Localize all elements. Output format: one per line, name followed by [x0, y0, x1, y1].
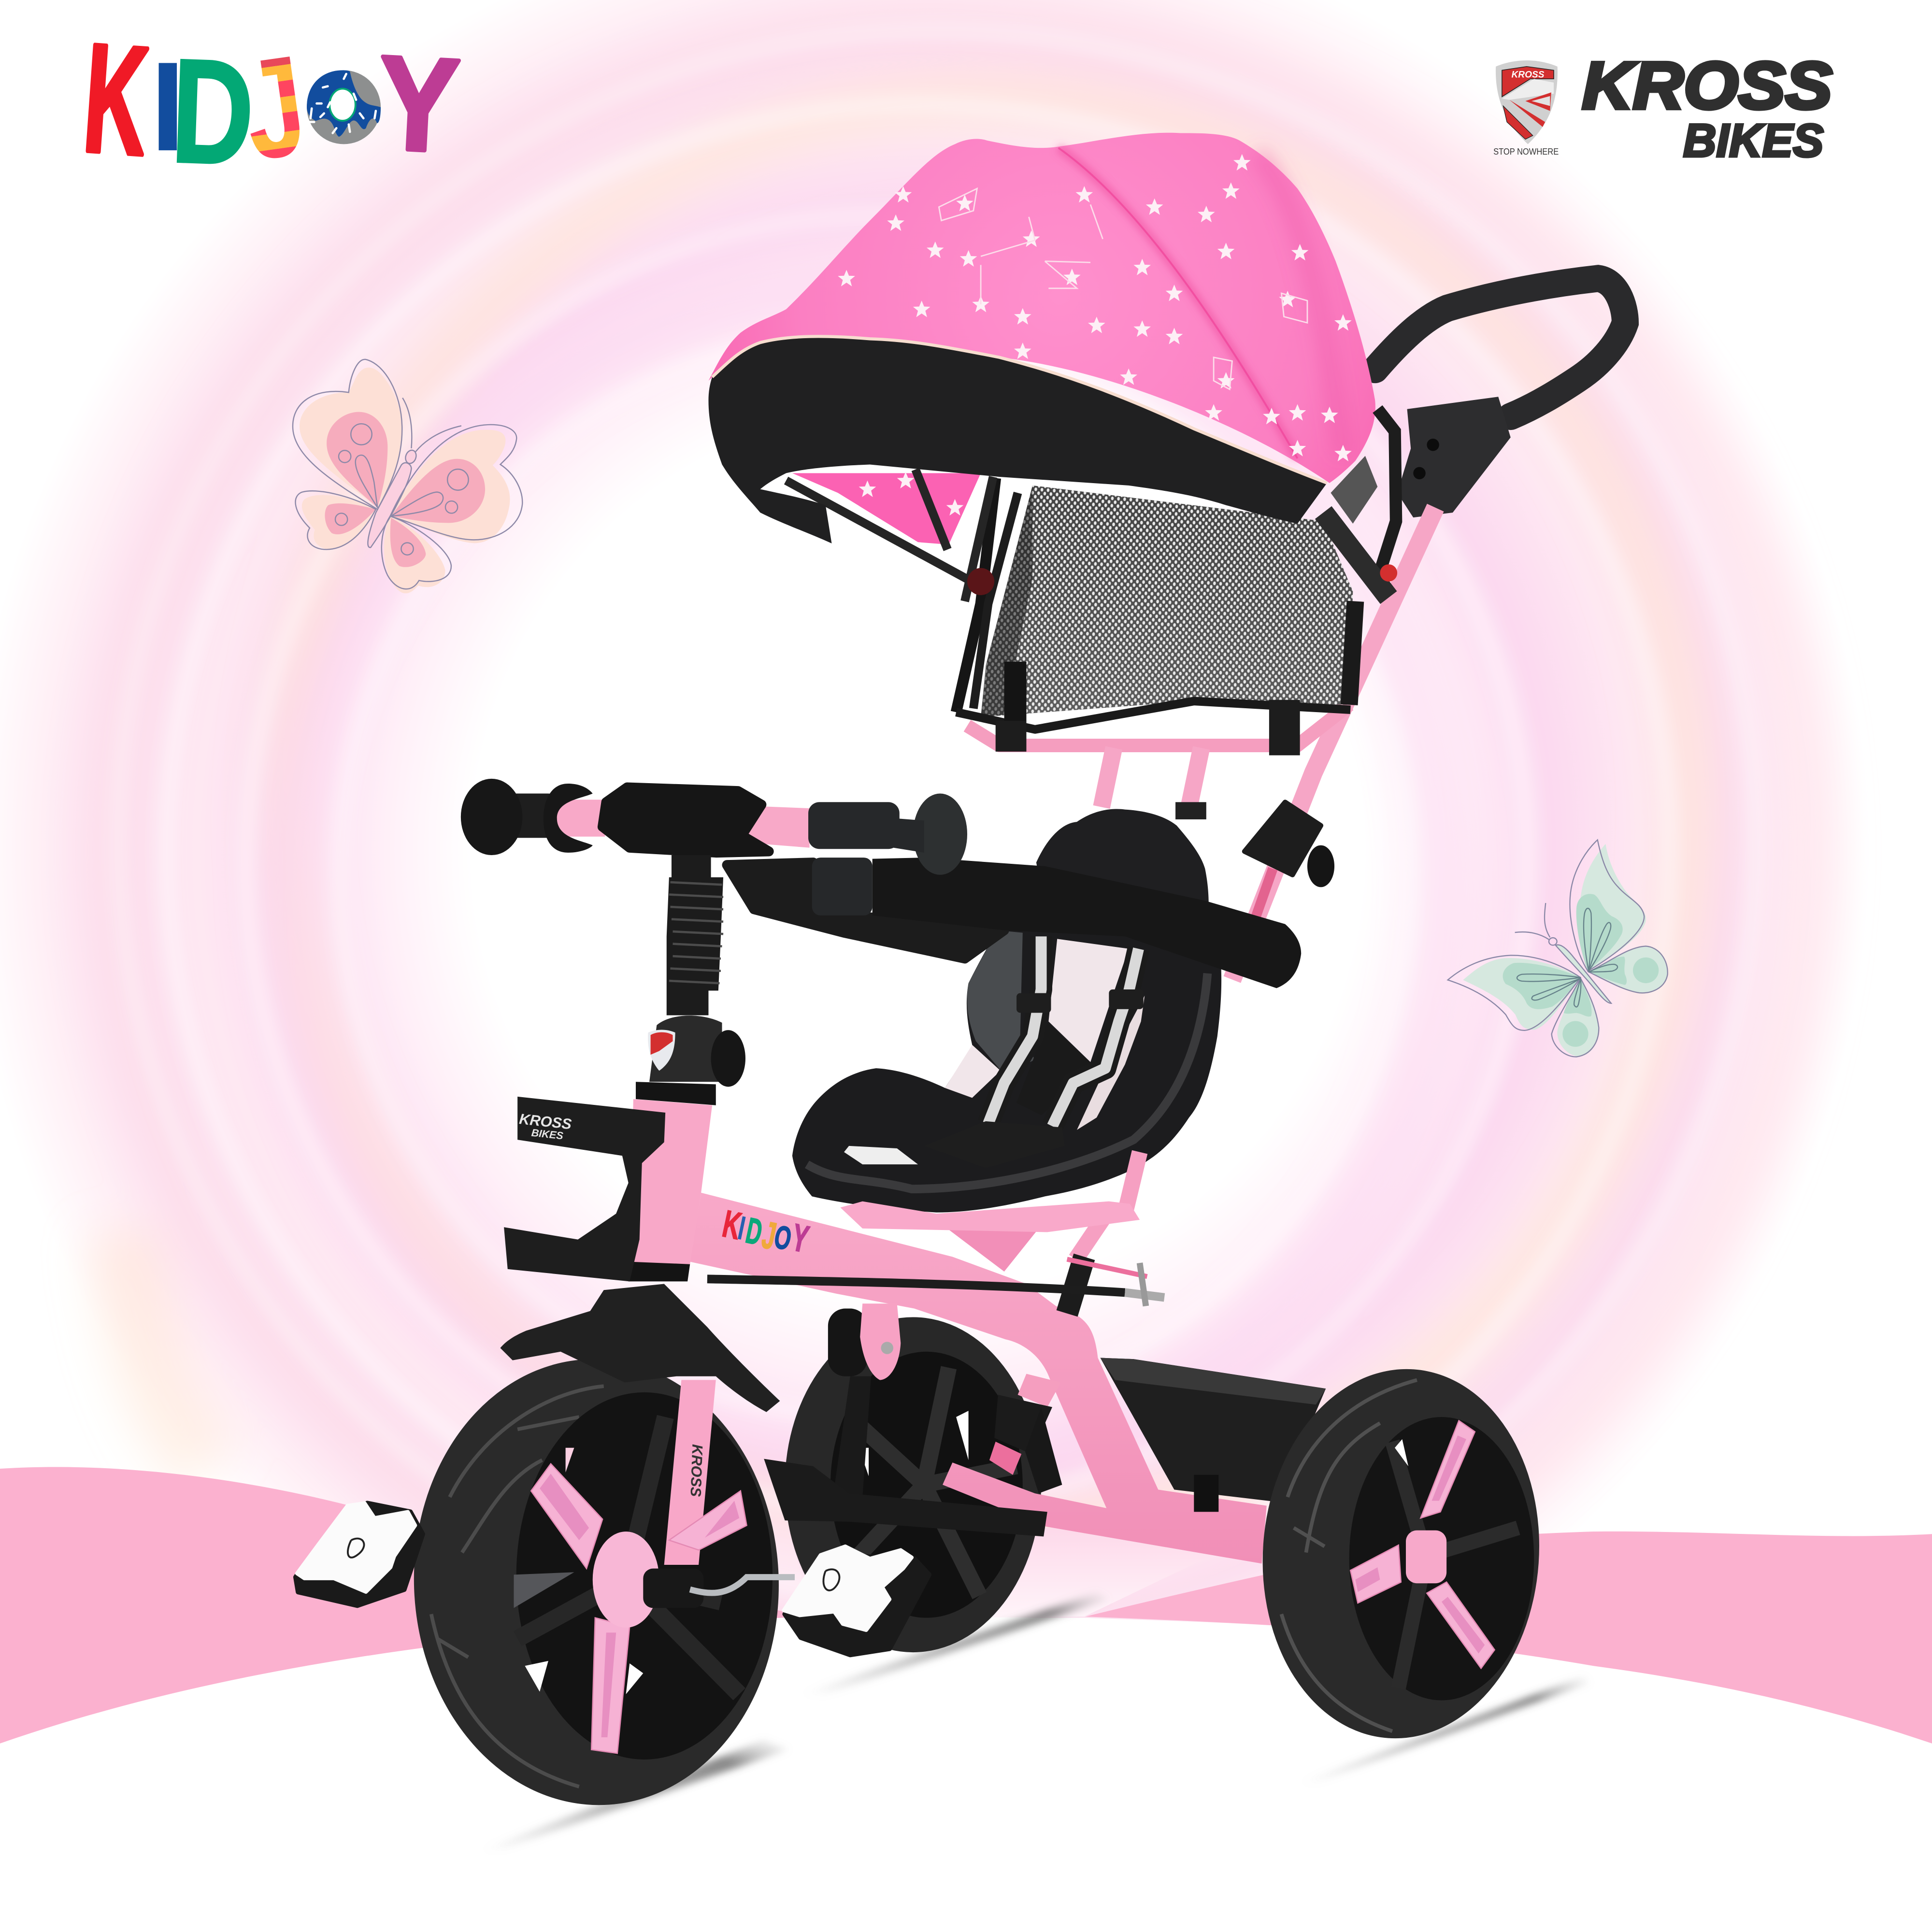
rear clamp post — [1067, 1257, 1084, 1314]
seat side wall — [967, 930, 1035, 1074]
wheel ground shadows — [481, 1592, 1589, 1851]
seat cushion right — [1077, 996, 1145, 1130]
rear pink tube — [1232, 508, 1435, 980]
rear bar section — [727, 862, 1004, 959]
mesh panel — [956, 478, 1355, 755]
wordmark bikes: BIKES — [1683, 114, 1824, 167]
adjust knob — [711, 1030, 745, 1087]
seat cushion left — [945, 1045, 1001, 1098]
canopy inner pink lining — [792, 473, 981, 544]
blade slots — [540, 1474, 739, 1737]
seat post tubes — [1075, 1152, 1140, 1259]
frame beam — [690, 1193, 1267, 1563]
seat — [792, 809, 1221, 1213]
red dial left — [967, 568, 994, 595]
blade slots — [1355, 1435, 1485, 1654]
seat back centre — [1016, 1023, 1090, 1115]
seat clamp stub — [989, 1374, 1062, 1493]
fork label: KROSS — [687, 1444, 705, 1497]
letter J: J — [235, 25, 315, 190]
small kidjoy logo: D — [743, 1210, 766, 1253]
kross shield — [1496, 60, 1558, 144]
spokes — [517, 1417, 739, 1694]
wheel gaps — [514, 1448, 643, 1694]
inner stars — [859, 472, 963, 515]
right grip — [808, 793, 967, 875]
canopy black visor — [708, 336, 1327, 544]
canopy fold shading — [1059, 148, 1343, 458]
seat plate — [840, 1202, 1140, 1232]
letter K: K — [79, 11, 153, 187]
brake cable — [707, 1259, 1164, 1306]
lap pad — [844, 1146, 918, 1164]
left pedal — [296, 1503, 423, 1605]
rim gap — [1395, 1439, 1408, 1466]
small kidjoy logo: Y — [788, 1216, 813, 1260]
small kidjoy logo: O — [771, 1218, 795, 1257]
canopy cream edge — [712, 336, 1327, 483]
pink wave left — [0, 1467, 813, 1744]
tagline: STOP NOWHERE — [1493, 146, 1559, 157]
footrest — [764, 1459, 1047, 1536]
small kidjoy logo: K — [719, 1202, 745, 1247]
left grip — [461, 779, 593, 855]
rear left wheel — [785, 1317, 1041, 1652]
kross shield: KROSS — [1511, 70, 1545, 80]
rim — [516, 1392, 773, 1760]
butterfly pink — [293, 359, 522, 593]
hub — [593, 1531, 659, 1628]
handlebar — [461, 779, 967, 875]
butterfly green — [1448, 840, 1668, 1057]
frame collar — [629, 1262, 690, 1281]
canopy folding arms — [786, 470, 993, 601]
pale band behind frame — [788, 1528, 1269, 1620]
bar collar — [812, 858, 873, 916]
pink wave right — [1086, 1531, 1932, 1744]
small kidjoy logo: I — [735, 1210, 748, 1246]
seat shell — [792, 918, 1221, 1213]
kross bikes logo — [1493, 48, 1832, 167]
blades — [531, 1464, 747, 1753]
pedal crank — [690, 1577, 795, 1593]
blades — [1350, 1421, 1495, 1668]
canopy support frame — [967, 705, 1349, 819]
white floor — [0, 1617, 1932, 1932]
harness buckles — [924, 989, 1144, 1168]
canopy pink fabric — [708, 133, 1375, 483]
hub — [1406, 1531, 1446, 1583]
harness straps — [988, 936, 1139, 1126]
right pedal — [784, 1546, 929, 1655]
small kidjoy logo — [719, 1202, 813, 1260]
small kidjoy logo: J — [758, 1213, 780, 1258]
canopy — [708, 133, 1397, 601]
letter I: I — [150, 36, 185, 177]
bottle holder — [504, 1097, 665, 1281]
kidjoy logo — [79, 11, 462, 196]
foam grip — [602, 787, 769, 853]
spokes — [1392, 1442, 1518, 1688]
stem ring — [636, 1082, 716, 1105]
head tube — [630, 1099, 712, 1264]
handle bracket — [1397, 397, 1511, 517]
crank cap — [643, 1569, 703, 1608]
seat bracket — [949, 1222, 1044, 1272]
stem emblem — [648, 1030, 675, 1071]
bottle holder: KROSS — [518, 1111, 572, 1132]
tire — [1250, 1360, 1551, 1748]
letter D: D — [169, 28, 257, 196]
bar tube left — [556, 800, 605, 837]
rear push handle — [1375, 278, 1625, 517]
seat headrest — [1036, 809, 1209, 912]
tread — [431, 1386, 604, 1787]
front foam bar — [873, 858, 1301, 988]
bar tube right — [748, 806, 810, 848]
seat rim — [807, 973, 1207, 1189]
canopy hinge bracket — [1323, 409, 1397, 598]
basket — [1100, 1358, 1326, 1512]
steering stem — [636, 855, 745, 1105]
front fender — [500, 1284, 780, 1412]
stem collar — [649, 1016, 722, 1082]
main frame — [629, 1099, 1267, 1563]
letter Y: Y — [374, 28, 462, 180]
safety bar — [727, 858, 1301, 988]
bottle holder: BIKES — [531, 1127, 564, 1142]
front fork — [664, 1380, 716, 1565]
tube clamp — [1236, 802, 1334, 973]
brake bracket — [828, 1303, 901, 1497]
canopy stars — [838, 154, 1352, 461]
seat cushion upper — [1048, 939, 1129, 1062]
front right wheel — [406, 1353, 787, 1811]
tire — [406, 1353, 787, 1811]
wordmark kross: KROSS — [1582, 48, 1832, 123]
rear right wheel — [1250, 1360, 1551, 1748]
rim — [1349, 1417, 1534, 1701]
